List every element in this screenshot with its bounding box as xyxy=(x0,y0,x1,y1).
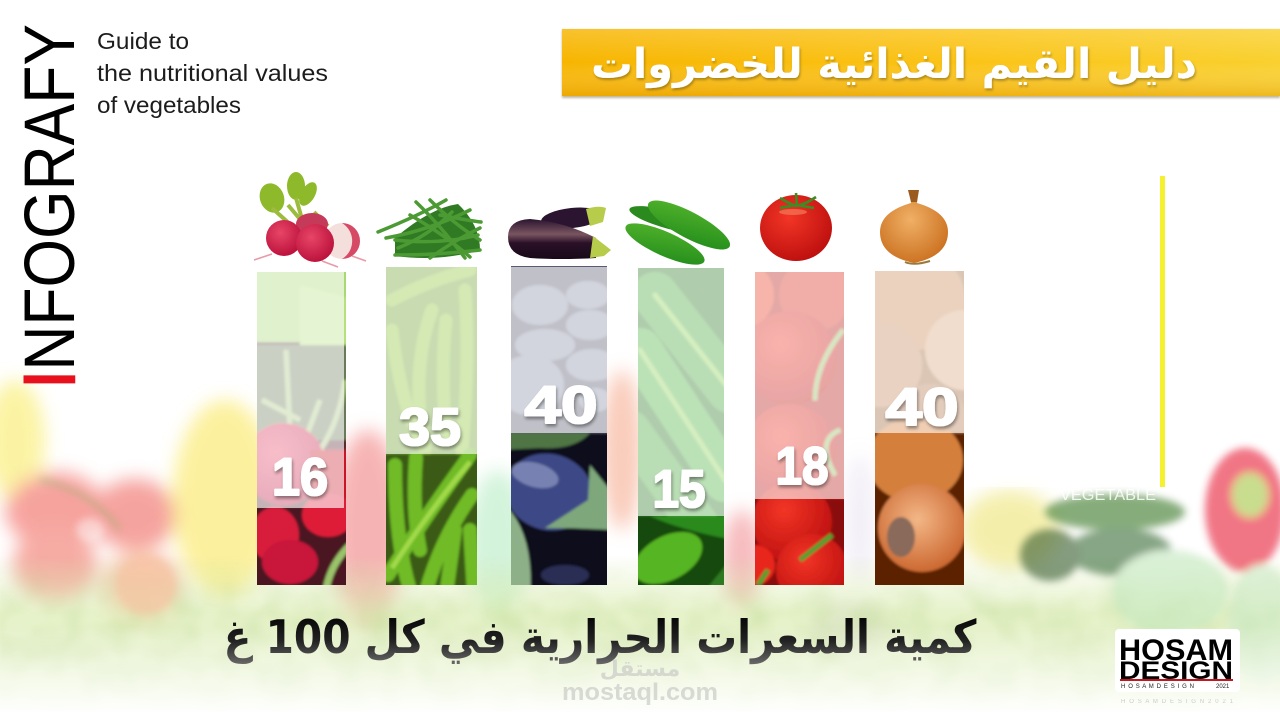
title banner xyxy=(562,29,1280,98)
icon: radish xyxy=(254,172,366,267)
label: VEGETABLE: VEGETABLE xyxy=(1060,487,1156,504)
bar: green beans, 35: 35 xyxy=(399,398,461,457)
bar: green beans, 35 xyxy=(386,267,477,585)
logo: Hosam Design xyxy=(1115,629,1240,705)
watermark: mostaql xyxy=(562,657,718,706)
bar: onion, 40 xyxy=(875,271,964,585)
icon: eggplant xyxy=(508,205,611,259)
bar: tomato, 18: 18 xyxy=(776,437,828,496)
lettuce strip xyxy=(0,562,1280,705)
icon: tomato xyxy=(760,193,832,261)
bar: cucumber, 15: 15 xyxy=(652,460,706,519)
translucent white panel with yellow rule xyxy=(964,176,1165,487)
watermark: mostaql: مستقل xyxy=(600,657,680,682)
subtitle text block: Guide to xyxy=(97,28,189,54)
bottom heading: كمية السعرات الحرارية في كل 100 غ xyxy=(224,612,977,665)
subtitle text block: the nutritional values xyxy=(97,60,328,86)
watermark: mostaql: mostaql.com xyxy=(562,679,718,706)
bar: radish, 16 xyxy=(257,272,346,585)
bar: onion, 40: 40 xyxy=(886,378,958,437)
bar: tomato, 18 xyxy=(755,272,844,585)
bottom fade xyxy=(0,625,1280,715)
bar: radish, 16: 16 xyxy=(272,448,328,507)
vegetable bar chart xyxy=(257,266,964,585)
logo: Hosam Design: 2021 xyxy=(1216,684,1230,690)
title banner: دليل القيم الغذائية للخضروات xyxy=(591,39,1197,89)
bar: eggplant, 40: 40 xyxy=(524,376,598,435)
subtitle text block: of vegetables xyxy=(97,92,241,118)
logo: Hosam Design: DESIGN xyxy=(1119,657,1233,685)
logo: Hosam Design: H O S A M D E S I G N 2 0 2 1 xyxy=(1121,699,1234,705)
icon: onion xyxy=(880,190,948,264)
logo: Hosam Design: H O S A M D E S I G N xyxy=(1121,684,1194,690)
bar: cucumber, 15 xyxy=(638,268,724,585)
icon: green beans xyxy=(378,200,481,258)
subtitle text block xyxy=(97,28,328,118)
logo: Hosam Design: HOSAM xyxy=(1119,634,1233,667)
bar: eggplant, 40 xyxy=(511,266,607,585)
icon: cucumbers xyxy=(621,192,736,272)
